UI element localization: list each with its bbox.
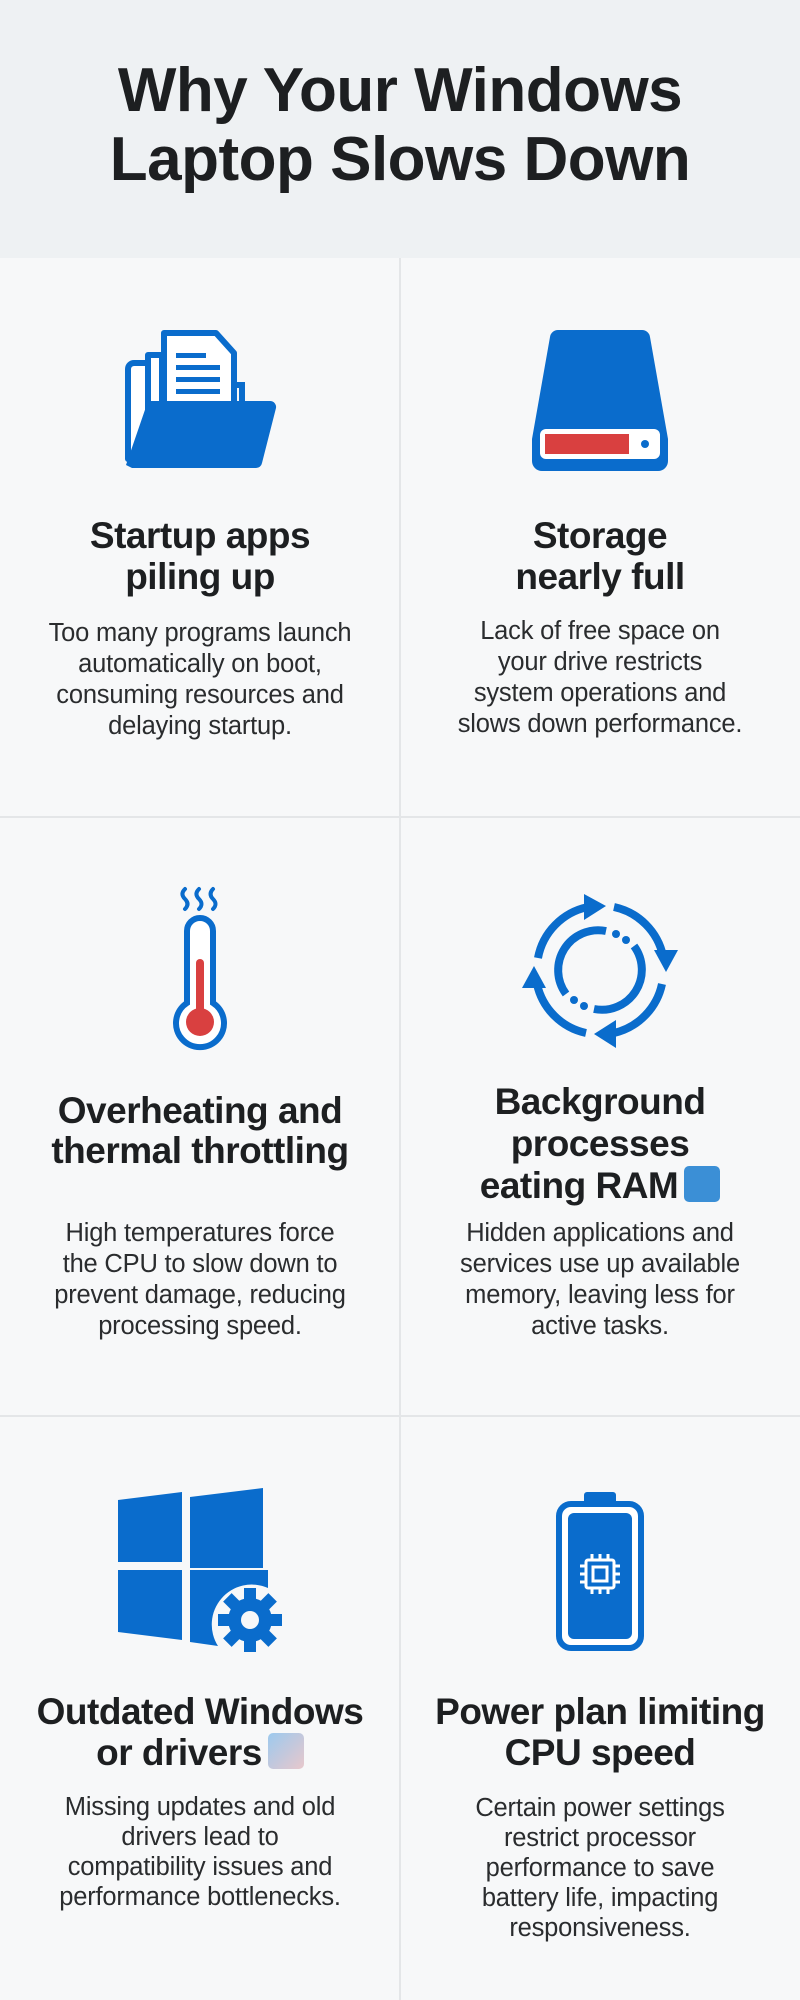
text: outdated bbox=[59, 1793, 341, 1911]
text: outdated: drivers lead to bbox=[121, 1823, 279, 1851]
title: Laptop Slows Down bbox=[110, 125, 690, 194]
text: power plan: responsiveness. bbox=[509, 1914, 691, 1942]
text: overheating: the CPU to slow down to bbox=[63, 1250, 337, 1278]
text: power plan bbox=[475, 1794, 725, 1942]
text: power plan: battery life, impacting bbox=[482, 1884, 718, 1912]
text: outdated: compatibility issues and bbox=[68, 1853, 332, 1881]
heading: overheating bbox=[51, 1090, 349, 1171]
text: storage: system operations and bbox=[474, 679, 726, 707]
text: startup: automatically on boot, bbox=[78, 650, 322, 678]
text: power plan: restrict processor bbox=[504, 1824, 696, 1852]
text: storage: Lack of free space on bbox=[480, 617, 720, 645]
heading: storage: Storage bbox=[533, 515, 667, 556]
text: background: memory, leaving less for bbox=[465, 1281, 735, 1309]
text: background: Hidden applications and bbox=[466, 1219, 734, 1247]
heading: overheating: thermal throttling bbox=[51, 1130, 349, 1171]
heading: outdated windows: Outdated Windows bbox=[37, 1691, 363, 1732]
heading: background processes: processes bbox=[511, 1123, 689, 1164]
heading: power plan: CPU speed bbox=[505, 1732, 695, 1773]
text: overheating bbox=[54, 1219, 346, 1340]
text: power plan: performance to save bbox=[486, 1854, 714, 1882]
text: overheating: prevent damage, reducing bbox=[54, 1281, 346, 1309]
heading: power plan: Power plan limiting bbox=[435, 1691, 765, 1732]
heading: outdated windows bbox=[37, 1691, 363, 1773]
text: outdated: Missing updates and old bbox=[65, 1793, 335, 1821]
heading: storage: nearly full bbox=[515, 556, 685, 597]
heading: overheating: Overheating and bbox=[58, 1090, 342, 1131]
header band bbox=[0, 0, 800, 258]
heading: startup: piling up bbox=[125, 556, 275, 597]
heading: power plan bbox=[435, 1691, 765, 1773]
heading: background processes: Background bbox=[495, 1081, 705, 1122]
icon: thermometer bbox=[173, 886, 227, 1050]
heading: background processes bbox=[480, 1081, 720, 1206]
icon: drive bbox=[532, 330, 668, 471]
icon: battery chip bbox=[556, 1492, 644, 1651]
heading: storage bbox=[515, 515, 685, 597]
text: startup: consuming resources and bbox=[56, 681, 344, 709]
text: overheating: processing speed. bbox=[98, 1312, 302, 1340]
heading: background processes: eating RAM bbox=[480, 1165, 678, 1206]
title bbox=[110, 56, 690, 194]
text: overheating: High temperatures force bbox=[66, 1219, 334, 1247]
text: background bbox=[460, 1219, 740, 1340]
text: storage: your drive restricts bbox=[498, 648, 702, 676]
text: storage bbox=[458, 617, 742, 738]
text: background: active tasks. bbox=[531, 1312, 669, 1340]
text: background: services use up available bbox=[460, 1250, 740, 1278]
text: startup: Too many programs launch bbox=[49, 619, 351, 647]
icon: sync arrows bbox=[522, 894, 678, 1048]
text: power plan: Certain power settings bbox=[475, 1794, 725, 1822]
icon: windows gear bbox=[118, 1488, 282, 1652]
title: Why Your Windows bbox=[118, 56, 682, 125]
text: startup bbox=[49, 619, 351, 740]
heading: outdated windows: or drivers bbox=[96, 1732, 262, 1773]
text: storage: slows down performance. bbox=[458, 710, 742, 738]
text: startup: delaying startup. bbox=[108, 712, 292, 740]
text: outdated: performance bottlenecks. bbox=[59, 1883, 341, 1911]
heading: startup bbox=[90, 515, 310, 597]
heading: startup: Startup apps bbox=[90, 515, 310, 556]
icon: folder bbox=[125, 330, 276, 468]
